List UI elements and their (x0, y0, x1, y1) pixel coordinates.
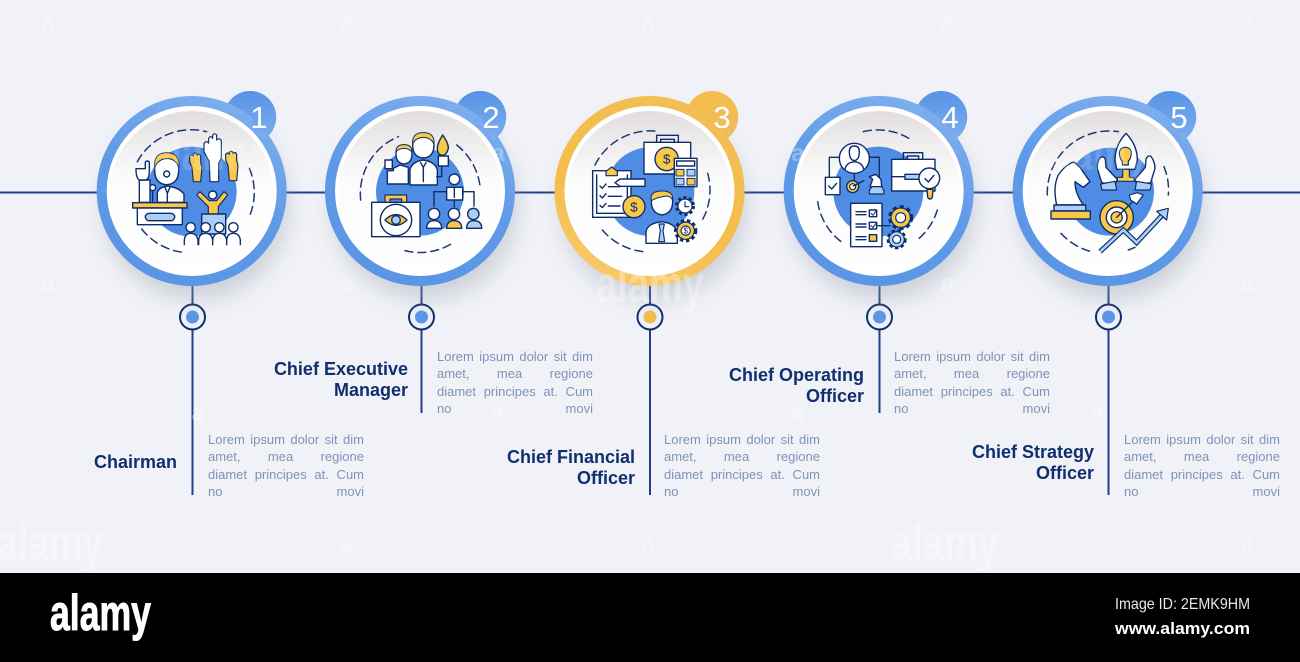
connector and node 3 (638, 285, 662, 495)
text block: Chief Financial Officer: diamet principes at. Cum (664, 467, 820, 482)
icon: finance briefcase, clipboard, calculator: $ (683, 227, 688, 236)
watermarks: a (41, 270, 55, 297)
text block: Chairman: diamet principes at. Cum (208, 467, 364, 482)
watermarks: a (340, 530, 354, 557)
watermarks: a (1240, 9, 1254, 36)
website: www.alamy.com (1114, 619, 1250, 638)
step 5 circle: Chief Strategy Officer (1013, 91, 1204, 299)
step 3 circle: Chief Financial Officer (554, 91, 746, 299)
watermarks: a (940, 9, 954, 36)
icon: finance briefcase, clipboard, calculator: $ (630, 199, 638, 214)
text block: Chief Financial Officer: Lorem ipsum dolor sit dim (664, 432, 820, 447)
watermarks: a (1240, 530, 1254, 557)
step 3 circle: Chief Financial Officer: 3 (713, 100, 731, 135)
heading: Chief Financial Officer: Officer (577, 468, 635, 488)
connector and node 1 (180, 285, 205, 495)
image id: Image ID: 2EMK9HM (1115, 596, 1250, 613)
heading: Chairman: Chairman (94, 452, 177, 472)
heading: Chief Operating Officer (729, 365, 864, 406)
text block: Chief Strategy Officer: no movi (1124, 484, 1280, 499)
heading: Chief Strategy Officer: Officer (1036, 463, 1094, 483)
text block: Chief Strategy Officer: amet, mea regione (1124, 449, 1280, 464)
watermarks: a (791, 140, 805, 167)
watermarks: alamy (1040, 124, 1148, 182)
text block: Chief Financial Officer: no movi (664, 484, 820, 499)
text block: Chief Executive Manager (437, 349, 593, 416)
step 1 circle: Chairman (97, 91, 288, 299)
text block: Chief Financial Officer: amet, mea regione (664, 449, 820, 464)
icon: finance briefcase, clipboard, calculator (593, 131, 710, 252)
text block: Chief Operating Officer: no movi (894, 401, 1050, 416)
text block: Chief Operating Officer: diamet principes at. Cum (894, 384, 1050, 399)
text block: Chief Strategy Officer: diamet principes at. Cum (1124, 467, 1280, 482)
step 2 circle: Chief Executive Manager (325, 91, 517, 299)
watermarks: a (1240, 270, 1254, 297)
connector and node 5 (1096, 285, 1121, 495)
watermarks: alamy (891, 514, 999, 572)
watermarks: a (191, 400, 205, 427)
text block: Chief Strategy Officer (1124, 432, 1280, 499)
watermarks: alamy (596, 256, 704, 314)
watermarks: a (641, 530, 655, 557)
connector and node 2 (409, 285, 434, 413)
watermarks: a (340, 270, 354, 297)
step 5 circle: Chief Strategy Officer: 5 (1170, 100, 1188, 135)
icon: chairman at podium with raised hands (133, 130, 254, 252)
icon: finance briefcase, clipboard, calculator: $ (663, 152, 671, 167)
heading: Chief Financial Officer (507, 447, 635, 488)
watermarks: alamy (0, 514, 103, 572)
text block: Chief Operating Officer: amet, mea regione (894, 366, 1050, 381)
icon: chess knight, rocket and target (1047, 131, 1169, 252)
step 4 circle: Chief Operating Officer: 4 (941, 100, 959, 135)
footer bar (0, 573, 1300, 662)
text block: Chief Executive Manager: Lorem ipsum dolor sit dim (437, 349, 593, 364)
watermarks: a (41, 9, 55, 36)
horizontal timeline (0, 192, 1300, 194)
text block: Chief Strategy Officer: Lorem ipsum dolor sit dim (1124, 432, 1280, 447)
text block: Chief Executive Manager: no movi (437, 401, 593, 416)
text block: Chief Operating Officer (894, 349, 1050, 416)
heading: Chief Executive Manager: Chief Executive (274, 359, 408, 379)
text block: Chairman: amet, mea regione (208, 449, 364, 464)
heading: Chief Strategy Officer: Chief Strategy (972, 442, 1094, 462)
watermarks: a (340, 9, 354, 36)
text block: Chief Operating Officer: Lorem ipsum dolor sit dim (894, 349, 1050, 364)
text block: Chief Executive Manager: diamet principes at. Cum (437, 384, 593, 399)
text block: Chairman: no movi (208, 484, 364, 499)
watermarks: alamy (150, 124, 258, 182)
connector and node 4 (867, 285, 892, 413)
footer logo: alamy (50, 585, 151, 641)
heading: Chief Operating Officer: Chief Operating (729, 365, 864, 385)
step 4 circle: Chief Operating Officer (784, 91, 975, 299)
watermarks: a (491, 140, 505, 167)
icon: operations manager, checklist and gears (818, 130, 940, 248)
text block: Chairman (208, 432, 364, 499)
heading: Chief Operating Officer: Officer (806, 386, 864, 406)
heading: Chief Strategy Officer (972, 442, 1094, 483)
heading: Chief Financial Officer: Chief Financial (507, 447, 635, 467)
heading: Chief Executive Manager (274, 359, 408, 400)
watermarks: a (490, 400, 504, 427)
step 2 circle: Chief Executive Manager: 2 (482, 100, 500, 135)
text block: Chairman: Lorem ipsum dolor sit dim (208, 432, 364, 447)
text block: Chief Financial Officer (664, 432, 820, 499)
heading: Chief Executive Manager: Manager (334, 380, 408, 400)
text block: Chief Executive Manager: amet, mea regione (437, 366, 593, 381)
watermarks: alamy (596, 256, 704, 314)
step 1 circle: Chairman: 1 (250, 100, 268, 135)
watermarks: a (641, 9, 655, 36)
icon: executives, vision briefcase and org chart (360, 133, 482, 252)
watermarks: a (790, 400, 804, 427)
watermarks: a (940, 270, 954, 297)
watermarks: a (1090, 400, 1104, 427)
